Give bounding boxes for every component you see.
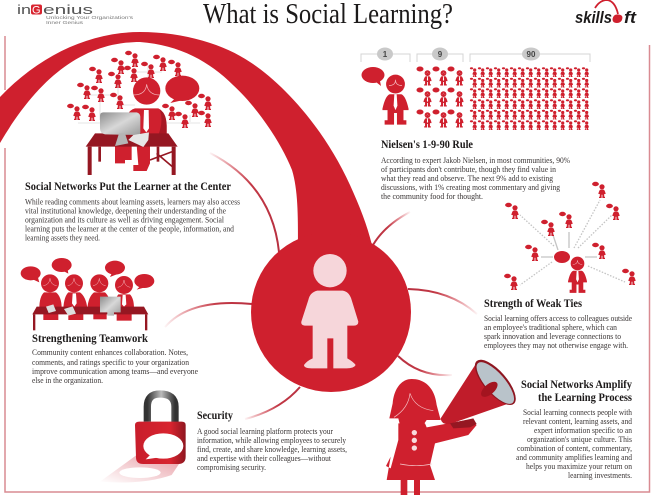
text: amplify	[516, 408, 633, 480]
table	[32, 307, 148, 330]
text: Nielsen: of participants don't contribute, though they find value in	[381, 165, 557, 174]
heading: Social Networks Put the Learner at the Center: Social Networks Put the Learner at the Center	[25, 181, 231, 193]
text: learner at center: vital institutional knowledge, deepening their understanding of the	[25, 206, 226, 216]
icons: the 9	[416, 66, 464, 128]
text: amplify: combination of content, commentary,	[517, 444, 632, 453]
text: security: information, while allowing employees to securely	[197, 436, 347, 445]
icon: central person	[568, 257, 587, 293]
icon: woman with megaphone	[386, 354, 522, 495]
monitor	[100, 112, 140, 135]
text: security	[197, 427, 347, 472]
text: weak ties: Social learning offers access to colleagues outside	[484, 314, 632, 323]
red arc band	[0, 32, 372, 245]
icon: padlock with speech bubble	[100, 394, 186, 482]
text: learner at center	[25, 198, 240, 242]
text: amplify: expert information specific to an	[534, 426, 633, 435]
text: security: find, create, and share knowledge, learning assets,	[197, 445, 347, 454]
text: amplify: relevant content, learning assets, and	[523, 417, 633, 426]
connector lines	[165, 153, 477, 419]
icon: the 1	[362, 67, 409, 125]
bubble	[554, 251, 570, 263]
logo: skillsoft: skills	[575, 8, 612, 27]
laptop	[128, 132, 149, 147]
text: weak ties: spark innovation and leverage connections to	[484, 332, 621, 341]
label: 9	[432, 48, 448, 60]
heading: Nielsen's 1-9-90 Rule: Nielsen's 1-9-90 Rule	[381, 139, 473, 151]
text: learner at center: While reading comments about learning assets, learners may also access	[25, 198, 240, 206]
text: teamwork: Community content enhances collaboration. Notes,	[32, 348, 188, 357]
chart: 1-9-90 rule	[361, 48, 590, 130]
text: amplify: helps you maximize your return on	[526, 462, 633, 471]
text: learner at center: organization and its culture as well as driving engagement. Social	[25, 216, 225, 224]
text: teamwork: else in the organization.	[32, 376, 103, 385]
logo: skillsoft: o	[612, 10, 623, 27]
logo: skillsoft	[575, 0, 637, 27]
text: teamwork: improve communication among teams—and everyone	[32, 367, 198, 376]
megaphone	[441, 362, 514, 424]
logo: inGenius	[17, 3, 134, 26]
label: 90	[522, 48, 540, 60]
text: security: and expertise with their colleagues—without	[197, 454, 332, 463]
center circle with learner	[251, 232, 411, 392]
legs	[115, 145, 150, 171]
text: Nielsen: discussions, with 1% creating most commentary and giving	[381, 183, 561, 192]
text: learner at center: learning puts the learner at the center of the people, information, and	[25, 224, 235, 234]
icon: team around table	[21, 258, 154, 330]
desk	[86, 133, 178, 175]
text: Nielsen: the community food for thought.	[381, 192, 483, 201]
logo: inGenius: Unlocking Your Organization's	[46, 15, 134, 21]
diagram: weak ties network	[504, 182, 636, 293]
speech bubble	[165, 76, 199, 103]
text: security: compromising security.	[197, 463, 266, 472]
logo: inGenius: Inner Genius	[46, 20, 84, 26]
heading: Security: Security	[197, 410, 233, 422]
text: amplify: learning investments.	[568, 471, 632, 480]
text: Nielsen	[381, 156, 570, 201]
text: weak ties: employees they may not otherwise engage with.	[484, 341, 628, 350]
text: amplify: organization's unique culture. This	[527, 435, 632, 444]
text: teamwork: comments, and ratings specific to your organization	[32, 358, 190, 367]
label: 1	[377, 48, 393, 60]
icon: learner at desk with network	[67, 51, 212, 175]
logo: inGenius: G	[32, 4, 41, 16]
text: security: A good social learning platform protects your	[197, 427, 333, 436]
tie	[143, 110, 149, 132]
text: Nielsen: According to expert Jakob Nielsen, in most communities, 90%	[381, 156, 570, 165]
heading: Social Networks Amplify the Learning Process: the Learning Process	[538, 392, 632, 404]
text: weak ties: an employee's traditional sphere, which can	[484, 323, 618, 332]
icon: center learner silhouette	[301, 254, 358, 368]
text: weak ties	[484, 314, 632, 350]
learner figure	[128, 77, 167, 135]
label: 90: 90	[527, 50, 536, 59]
text: amplify: Social learning connects people with	[523, 408, 633, 417]
heading: Social Networks Amplify the Learning Process: Social Networks Amplify	[521, 379, 632, 391]
text: learner at center: learning assets they need.	[25, 234, 100, 242]
label: 1: 1	[383, 50, 388, 59]
logo: inGenius: enius	[43, 3, 93, 17]
heading: Strengthening Teamwork: Strengthening Teamwork	[32, 333, 149, 345]
text: Nielsen: what they read and observe. The next 9% add to existing	[381, 174, 554, 183]
heading: Social Networks Amplify the Learning Process	[521, 379, 632, 404]
icons: the 90	[470, 67, 589, 130]
heading: Strength of Weak Ties: Strength of Weak Ties	[484, 298, 582, 310]
logo: skillsoft: ft	[624, 8, 637, 27]
text: amplify: and community amplifies learning and	[516, 453, 633, 462]
logo: inGenius: in	[17, 3, 31, 17]
text: teamwork	[32, 348, 198, 385]
label: 9: 9	[438, 50, 443, 59]
